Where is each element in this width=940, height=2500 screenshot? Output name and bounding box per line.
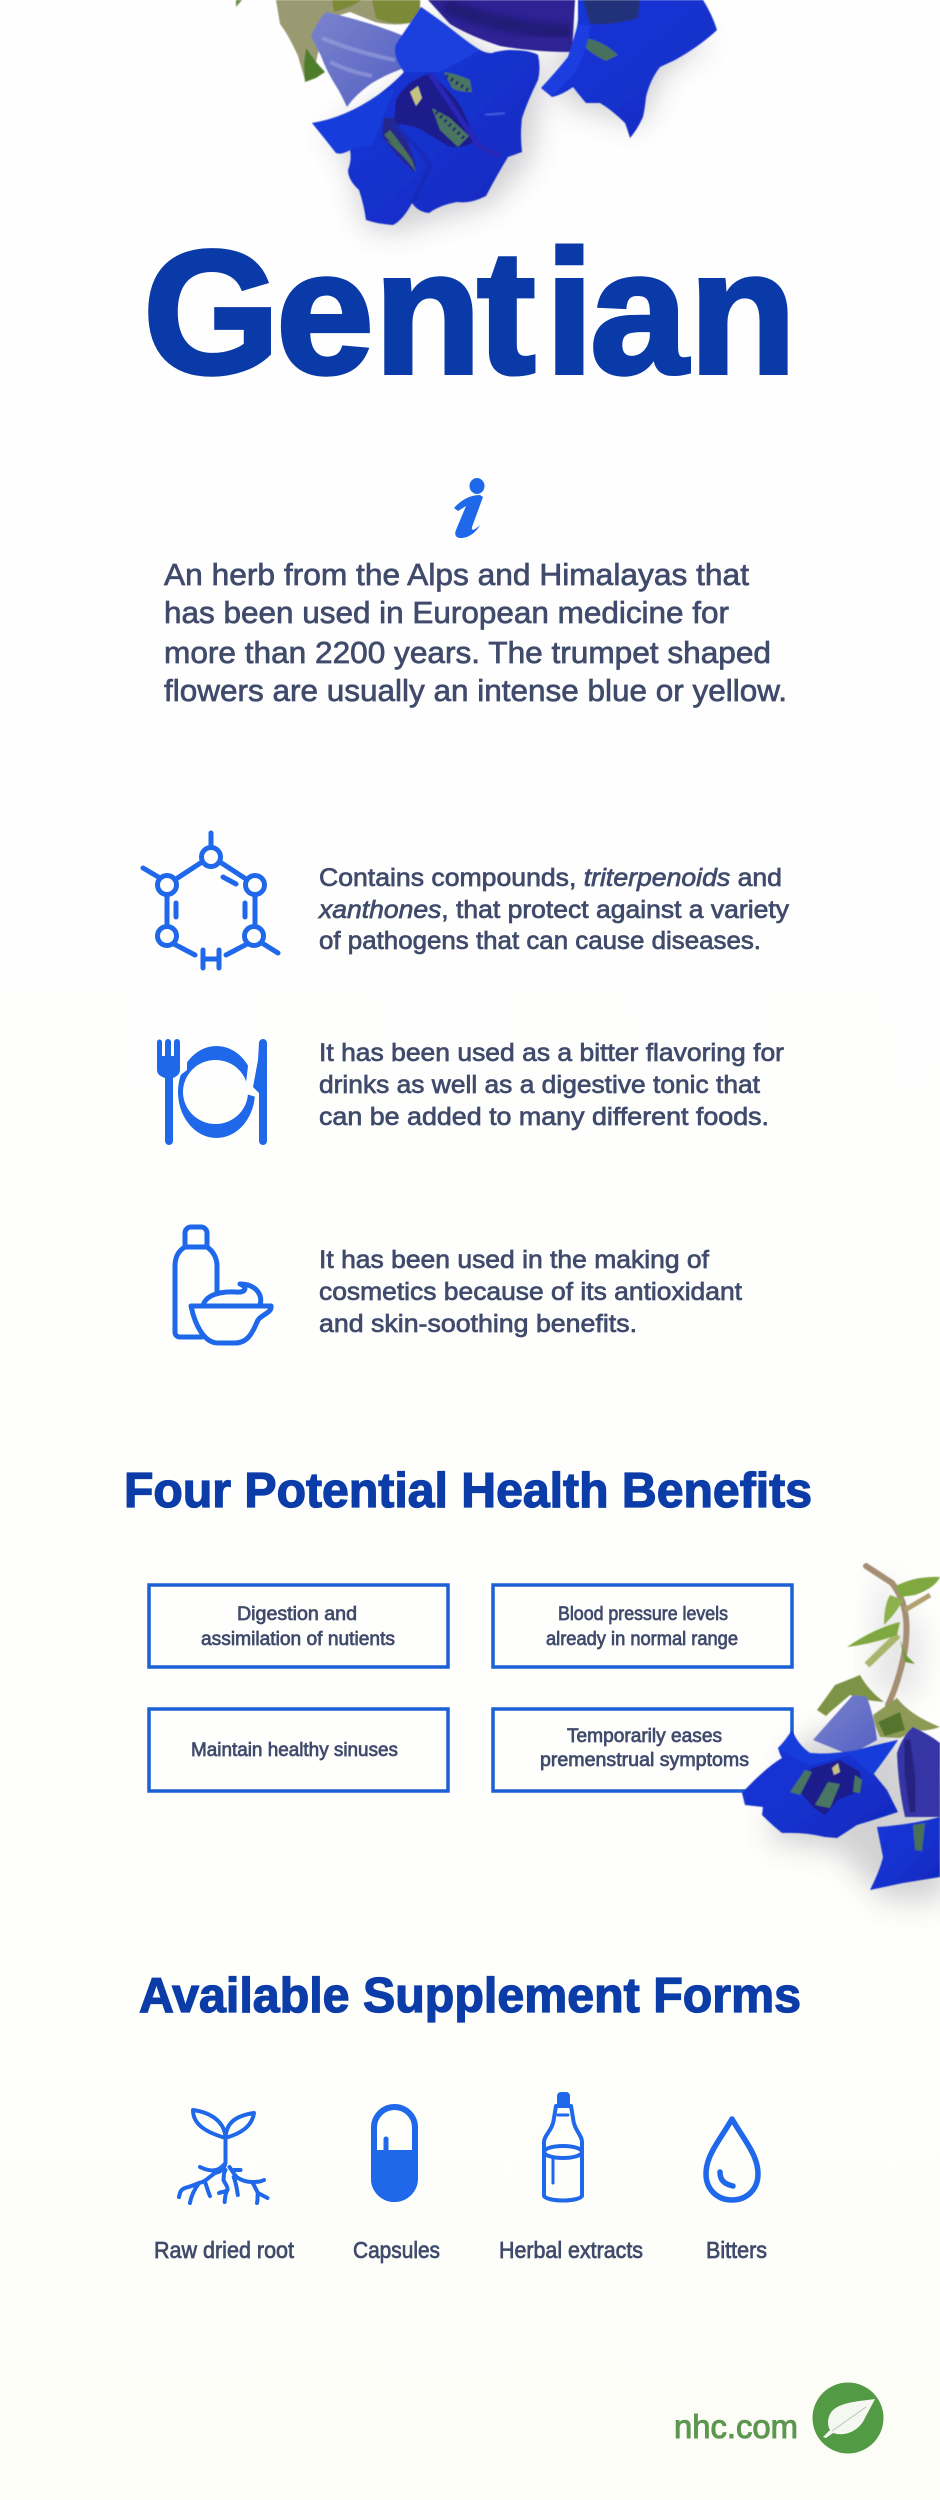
panel: premenstrual [493,1709,792,1791]
logo text: nhc.com [674,2408,798,2445]
panel: digestion: assimilation of nutients [201,1629,395,1650]
text: flavoring [319,1039,784,1131]
intro text: An herb from the Alps and Himalayas that [164,557,749,592]
intro text [164,557,787,708]
text: compounds: Contains compounds, triterpenoids and [319,864,782,892]
label: capsules: Capsules [353,2237,440,2263]
label: herbal extracts: Herbal extracts [499,2237,643,2263]
text: compounds: of pathogens that can cause diseases. [319,927,761,955]
heading: available supplement forms: Available Supplement Forms [139,1969,801,2023]
panel: digestion [149,1585,448,1667]
text: compounds [318,864,790,955]
text: cosmetics: and skin-soothing benefits. [319,1310,637,1338]
throat [798,1760,862,1815]
second flower petals [541,0,717,138]
icon: molecule [143,833,278,968]
text: cosmetics: It has been used in the making of [319,1246,709,1274]
intro text: has been used in European medicine for [164,595,729,630]
main petals [742,1730,898,1838]
text: cosmetics: cosmetics because of its antioxidant [319,1278,742,1306]
logo mark [812,2382,884,2454]
panel: premenstrual: Temporarily eases [567,1726,722,1747]
heading: four potential health benefits: Four Potential Health Benefits [124,1464,812,1518]
tubes [813,1695,877,1755]
flower throat [394,74,474,147]
intro text: flowers are usually an intense blue or yellow. [164,673,787,708]
flower illustration: top [236,0,717,232]
text: compounds: xanthones , that protect against a variety [318,896,790,924]
main flower petals [312,7,540,225]
panel: blood pressure: already in normal range [546,1629,738,1650]
panel: sinuses [149,1709,448,1791]
icon: cosmetics [175,1227,271,1343]
label: raw dried root: Raw dried root [154,2237,295,2263]
panel: premenstrual: premenstrual symptoms [540,1750,749,1771]
icon: bitters drop [706,2119,758,2200]
text: flavoring: can be added to many different foods. [319,1103,769,1131]
flower illustration: right [742,1566,940,1900]
leaves [896,1577,940,1597]
panel: digestion: Digestion and [237,1604,357,1625]
text: flavoring: It has been used as a bitter flavoring for [319,1039,784,1067]
calyx leaves [276,0,420,80]
text: flavoring: drinks as well as a digestive tonic that [319,1071,760,1099]
pale tube [311,12,404,107]
stems [866,1566,907,1705]
calyx [817,1675,884,1716]
label: bitters: Bitters [706,2237,767,2263]
title: Gentian [143,215,797,411]
dark tube of second flower [428,0,575,52]
icon: info [454,478,484,538]
panel: blood pressure: Blood pressure levels [558,1604,728,1625]
panel: sinuses: Maintain healthy sinuses [191,1740,398,1761]
icon: dried root [179,2110,268,2203]
icon: herbal extract bottle [544,2092,582,2200]
text: cosmetics [319,1246,742,1338]
panel: blood pressure [493,1585,792,1667]
second petals [870,1817,940,1890]
icon: capsule [371,2107,417,2202]
intro text: more than 2200 years. The trumpet shaped [164,635,771,670]
icon: plate and cutlery [157,1039,267,1145]
